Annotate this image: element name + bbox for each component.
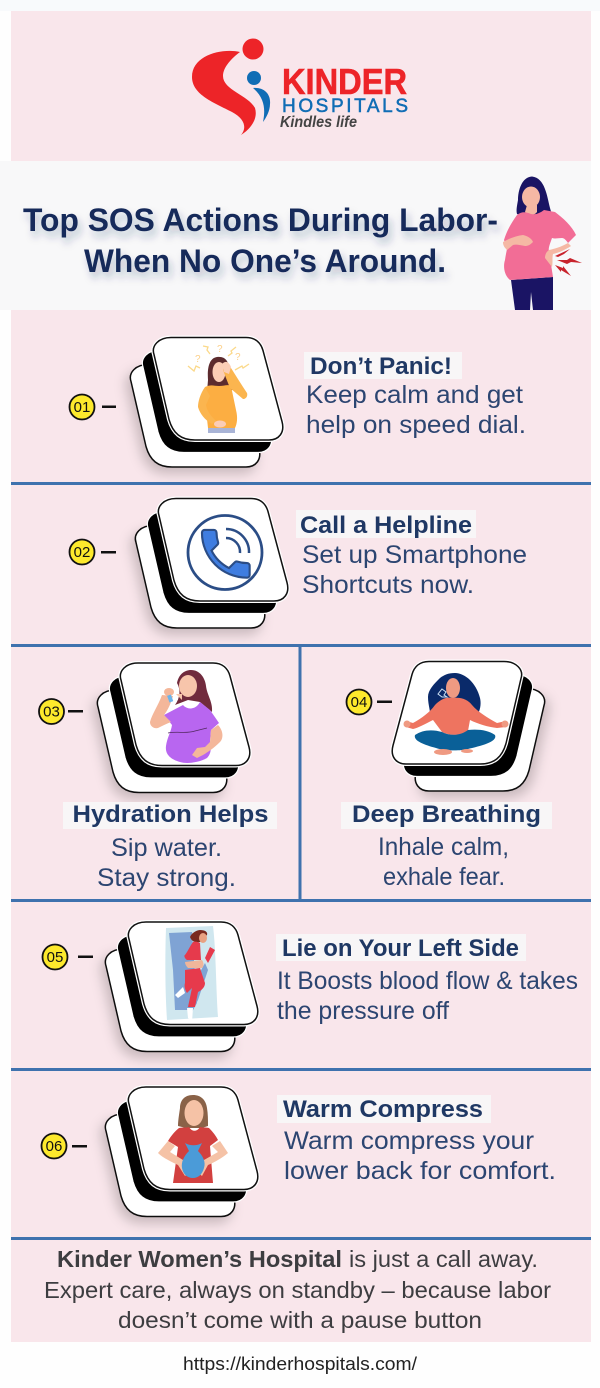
logo: Kinder Hospitals xyxy=(192,38,408,135)
panel: step 06 xyxy=(42,1087,556,1216)
panel: step 01 xyxy=(70,338,526,467)
step 02 text: Shortcuts now. xyxy=(302,571,474,599)
badge 04 xyxy=(346,690,392,714)
step 03 text xyxy=(63,801,277,892)
step 04 text: Inhale calm, xyxy=(378,833,509,861)
badge 06: 06 xyxy=(46,1138,62,1155)
logo: Kinder Hospitals: HOSPITALS xyxy=(282,96,408,117)
panel: step 05 xyxy=(42,922,578,1052)
footer text: Expert care, always on standby – because labor xyxy=(44,1277,551,1303)
badge 01 xyxy=(70,394,116,420)
step 06 text: Warm Compress xyxy=(283,1096,483,1123)
step 05 text: Lie on Your Left Side xyxy=(282,935,519,962)
footer text: Kinder Women’s Hospital xyxy=(57,1246,342,1272)
step 06 text: lower back for comfort. xyxy=(284,1157,556,1185)
step 05 text xyxy=(276,934,578,1025)
card stack with worried woman xyxy=(130,338,283,467)
badge 04: 04 xyxy=(351,694,367,711)
panel: step 02 xyxy=(70,498,527,628)
card stack with woman holding warm compress xyxy=(105,1087,258,1216)
badge 02: 02 xyxy=(74,544,90,561)
footer text: doesn’t come with a pause button xyxy=(118,1307,482,1333)
card stack with woman lying on left side xyxy=(105,922,258,1052)
logo: Kinder Hospitals: Kindles life xyxy=(280,114,357,131)
step 02 text: Call a Helpline xyxy=(300,512,472,539)
card stack with worried woman: ? xyxy=(217,344,223,355)
website url: https://kinderhospitals.com/ xyxy=(183,1354,417,1374)
step 05 text: It Boosts blood flow & takes xyxy=(277,967,578,995)
panel: logo header xyxy=(11,11,591,161)
badge 06 xyxy=(42,1134,87,1158)
card stack with meditating woman xyxy=(392,662,545,791)
step 04 text: Deep Breathing xyxy=(352,801,541,828)
badge 02 xyxy=(70,540,116,564)
step 03 text: Hydration Helps xyxy=(72,801,268,828)
icon: pregnant woman in pain xyxy=(503,176,582,310)
divider lines xyxy=(11,482,591,1240)
card stack with woman drinking water xyxy=(97,663,250,792)
badge 05: 05 xyxy=(47,949,63,966)
step 03 text: Stay strong. xyxy=(97,864,236,892)
step 04 text: exhale fear. xyxy=(383,863,505,891)
panel: step 04 xyxy=(341,662,552,891)
step 06 text: Warm compress your xyxy=(284,1127,534,1155)
step 04 text xyxy=(341,801,552,891)
step 01 text: Don’t Panic! xyxy=(310,353,452,380)
footer text xyxy=(44,1246,551,1333)
badge 01: 01 xyxy=(74,399,90,416)
card stack with phone icon xyxy=(135,498,288,628)
badge 05 xyxy=(42,944,93,970)
step 06 text xyxy=(277,1095,556,1185)
card stack with worried woman: ? xyxy=(235,352,241,363)
title: When No One’s Around. xyxy=(84,243,446,279)
card stack with worried woman: ? xyxy=(195,354,201,365)
step 02 text xyxy=(296,510,527,599)
footer text: is just a call away. xyxy=(349,1246,538,1272)
badge 03: 03 xyxy=(43,704,60,720)
title xyxy=(23,202,498,279)
step 03 text: Sip water. xyxy=(111,834,222,862)
step 05 text: the pressure off xyxy=(277,997,449,1025)
badge 03 xyxy=(39,699,83,724)
logo: Kinder Hospitals: KINDER xyxy=(282,61,407,102)
step 01 text: Keep calm and get xyxy=(306,381,523,409)
step 01 text: help on speed dial. xyxy=(306,411,526,439)
panel: title band xyxy=(0,161,591,310)
step 02 text: Set up Smartphone xyxy=(302,541,527,569)
panel: step 03 xyxy=(39,663,277,892)
title: Top SOS Actions During Labor- xyxy=(23,202,498,238)
step 01 text xyxy=(304,352,526,439)
